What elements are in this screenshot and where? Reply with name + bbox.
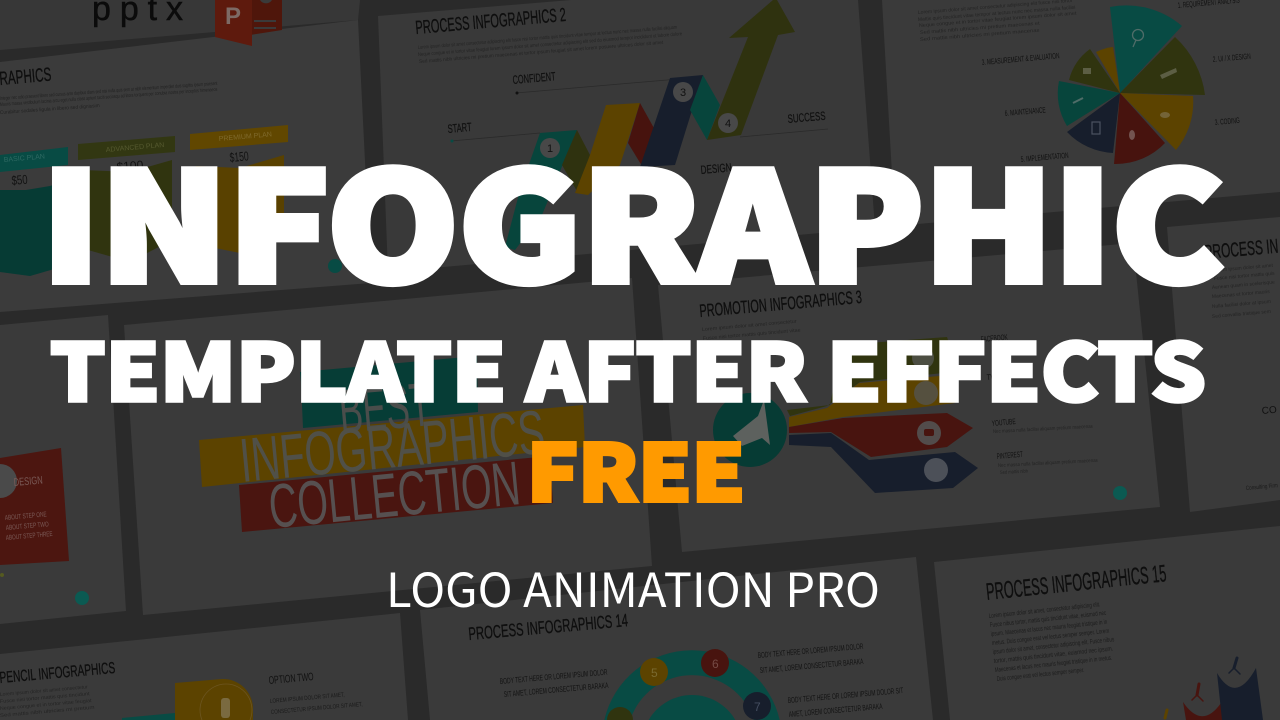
panel: left design slide (0, 315, 126, 624)
labels: channels: FACEBOOK (980, 333, 1008, 344)
text block: lorem body: Maecenas et lacus nec mauris feugiat tristique in in metus. (994, 655, 1113, 674)
text block: lorem body: Duis congue erat vel lectus semper semper. (996, 667, 1085, 683)
text block: body left: BODY TEXT HERE OR LOREM IPSUM DOLOR (499, 668, 608, 686)
chart: semicircle steps: 7 (754, 700, 761, 714)
text block: lorem body: tortor, mattis quis tincidunt vitae, euismod nec ipsum. (993, 645, 1114, 665)
text block: option body: CONSECTETUR IPSUM DOLOR SIT AMET, (271, 702, 363, 716)
text block: intro: Fusce nisi tortor mattis quis (1214, 271, 1275, 282)
text block: intro: Neque congue et in tortor vitae feugiat lorem ipsum dolor sit amet (919, 11, 1077, 29)
text block: option body: LOREM IPSUM DOLOR SIT AMET, (270, 692, 345, 705)
card: design step: DESIGN (13, 475, 43, 489)
text block: intro: Lorem ipsum dolor sit amet consectetur adipiscing elit fusce nisi tortor mattis quis tincidunt vitae tempor at lectus nunc nec massa nulla facilisi aliquam (418, 25, 677, 51)
title: infographic: INFOGRAPHIC (42, 108, 1224, 326)
text block: intro (0, 81, 218, 116)
subtitle: template after effects: TEMPLATE AFTER EFFECTS (50, 309, 1206, 424)
title block: collection (239, 456, 553, 532)
panel: top right slide with pie (882, 0, 1280, 226)
chart: semicircle steps: 6 (712, 657, 719, 671)
text block: intro: Lorem ipsum dolor sit amet consectetur (702, 319, 797, 333)
slide title: infographics: INFOGRAPHICS (237, 398, 548, 496)
card: premium plan: PREMIUM PLAN (219, 131, 272, 143)
text block: intro: Sed mattis nibh ultricies mi pretium maecenas et (920, 21, 1040, 36)
credit: logo animation pro: LOGO ANIMATION PRO (386, 552, 880, 621)
text block: intro (702, 319, 1098, 476)
text block: intro: Lorem ipsum dolor sit amet consectetur (0, 684, 88, 698)
text block: intro: Mattis quis tincidunt vitae tempor at lectus nunc nec massa nulla facilisi (918, 5, 1076, 23)
slide title: best: BEST (336, 370, 434, 447)
text block: intro: Fusce nisi tortor mattis quis tincidunt vitae (703, 327, 801, 342)
label: option two: OPTION TWO (268, 671, 314, 687)
chart: runners on rising bars (1165, 658, 1263, 720)
text block: intro (1212, 263, 1275, 320)
labels: channels: TWITTER (986, 371, 1014, 382)
card: premium plan (190, 125, 288, 253)
text block: intro: Aenean quam in scelerisque (1212, 279, 1275, 291)
text block: body right: SIT AMET, LOREM CONSECTETUR BARAKA (759, 657, 864, 675)
label: contact: CO (1261, 405, 1277, 417)
chart: radial pie (1058, 5, 1205, 164)
text block: body right: BODY TEXT HERE OR LOREM IPSUM DOLOR (757, 642, 864, 660)
text block: lorem body (988, 601, 1115, 683)
text block: intro: Curabitur sodales ligula in libero sed dignissim (0, 103, 100, 116)
icon: powerpoint: P (225, 3, 241, 30)
labels: channels: PINTEREST (996, 450, 1023, 461)
heading: pencil infographics: PENCIL INFOGRAPHICS (0, 660, 116, 687)
text block: intro: Fusce nisi tortor mattis quis tincidunt (0, 691, 90, 705)
label: pptx logo (92, 0, 282, 46)
card: advanced plan: ADVANCED PLAN (106, 142, 165, 154)
chart: rising ribbon arrow: 3 (680, 87, 686, 99)
text block: lorem body: metus. Duis congue erat vel lectus semper semper. Lorem (991, 628, 1110, 647)
label: success: SUCCESS (787, 109, 826, 126)
card: basic plan: BASIC PLAN (4, 153, 45, 164)
labels: pie categories: 3. MEASUREMENT & EVALUATION (981, 51, 1060, 67)
panel: top left pricing slide (0, 20, 371, 312)
label: start: START (447, 120, 473, 136)
panel: process infographics 15 slide (934, 526, 1280, 720)
label: confident: CONFIDENT (512, 69, 557, 87)
heading: process infographics 14: PROCESS INFOGRAPHICS 14 (468, 610, 629, 644)
card: design step: ABOUT STEP TWO (6, 521, 49, 532)
text block: body left: SIT AMET, LOREM CONSECTETUR BARAKA (503, 681, 609, 699)
text block: intro: Sed mattis nibh ultricies mi pretium (0, 705, 95, 719)
chart: arrow ribbons (787, 337, 978, 493)
labels: pie categories: 2. UI / X DESIGN (1212, 52, 1251, 64)
heading: infographics: RAPHICS (0, 65, 52, 90)
text block: body left (499, 668, 609, 699)
text block: lorem body: Fusce nibus tortor, mattis quis tincidunt vitae, euismod nec (989, 610, 1107, 629)
card: basic plan: $50 (11, 172, 28, 188)
text block: intro (918, 0, 1077, 43)
label: free: FREE (527, 412, 745, 524)
panel: top band behind logo (0, 0, 360, 50)
panel: process infographics right slide (1167, 217, 1280, 512)
icon: extinguisher badge (122, 679, 253, 720)
text block: intro (0, 684, 95, 719)
labels: pie categories (981, 0, 1251, 164)
labels: channels (980, 333, 1023, 461)
card: basic plan (0, 147, 68, 276)
chart: semicircle steps: 5 (651, 666, 658, 680)
card: advanced plan (78, 136, 175, 262)
card: advanced plan: $100 (116, 158, 144, 174)
title block: best (300, 356, 478, 428)
title block: infographics (199, 405, 585, 487)
card: design step (0, 448, 69, 565)
slide title: collection: COLLECTION (266, 449, 523, 542)
text block: lorem body: ipsum. Maecenas et lacus nec mauris feugiat tristique in in (990, 619, 1108, 638)
text block: body right: BODY TEXT HERE OR LOREM IPSUM DOLOR SIT (787, 686, 904, 705)
labels: pie categories: 6. MAINTENANCE (1004, 105, 1046, 118)
panel: process infographics 2 slide (378, 0, 875, 272)
labels: channels: YOUTUBE (991, 417, 1016, 428)
panel: process infographics 14 slide (420, 557, 933, 720)
panel: promotion infographics 3 slide (658, 243, 1160, 552)
labels: pie categories: 5. IMPLEMENTATION (1020, 151, 1069, 164)
card: design step: ABOUT STEP THREE (6, 531, 53, 542)
chart: rising ribbon arrow (505, 0, 795, 250)
text block: intro: Maecenas et tortor mauris (1212, 289, 1271, 300)
chart: rising ribbon arrow: 1 (547, 143, 553, 155)
chart: rising ribbon arrow: 4 (725, 118, 731, 130)
chart: semicircle steps (604, 649, 780, 720)
text block: intro: Nec massa nulla facilisi aliquam pretium maecenas (993, 424, 1093, 435)
icon: megaphone (713, 393, 787, 467)
text block: body right (757, 642, 904, 719)
text block: intro: Sed convallis tristique sem (1212, 309, 1271, 320)
panel: pencil infographics slide (0, 613, 408, 720)
text block: intro: Sed mattis nibh ultricies mi pretium maecenas et tortor ipsum feugiat sit amet lorem posuere ultrices dolor sit amet (419, 40, 664, 65)
text block: intro: Integer nec odio praesent libero sed cursus ante dapibus diam sed nisi nulla quis sem at nibh elementum imperdiet duis sagittis ipsum praesent (0, 81, 218, 102)
text block: intro: Lorem ipsum dolor sit amet (1213, 263, 1274, 274)
text block: intro: Mauris massa vestibulum lacinia arcu eget nulla class aptent taciti sociosqu ad litora torquent per conubia nostra per inceptos himenaeos (0, 87, 218, 108)
card: design step: ABOUT STEP ONE (5, 511, 47, 522)
text block: intro: Neque congue et in tortor vitae feugiat lorem ipsum dolor sit amet consectetur adipiscing elit sed do eiusmod tempor incididunt ut labore dolore (418, 31, 683, 58)
text block: intro (418, 25, 683, 65)
heading: promotion infographics 3: PROMOTION INFOGRAPHICS 3 (699, 287, 863, 321)
icon: powerpoint (215, 0, 282, 46)
text block: intro: Neque congue et in tortor vitae feugiat (0, 698, 92, 712)
label: design: DESIGN (700, 160, 732, 177)
labels: pie categories: 3. CODING (1214, 116, 1240, 127)
text block: intro: Nulla facilisi dolor at ipsum (1212, 299, 1271, 310)
text block: intro: Nec massa nulla facilisi aliquam pretium maecenas (998, 458, 1098, 469)
text block: lorem body: Lorem ipsum dolor sit amet, consectetur adipiscing elit. (988, 601, 1101, 620)
text block: intro: Sed mattis nibh (1000, 469, 1028, 476)
card: premium plan: $150 (229, 148, 249, 165)
text block: body right: AMET, LOREM CONSECTETUR BARAKA (788, 702, 883, 719)
text block: option body (270, 692, 363, 716)
panel: best infographics collection slide (124, 278, 652, 615)
text block: intro: Sed mattis nibh ultricies mi pretium maecenas (920, 28, 1040, 43)
text block: lorem body: ipsum dolor sit amet, consectetur adipiscing elit. Fusce nibus (992, 636, 1115, 656)
